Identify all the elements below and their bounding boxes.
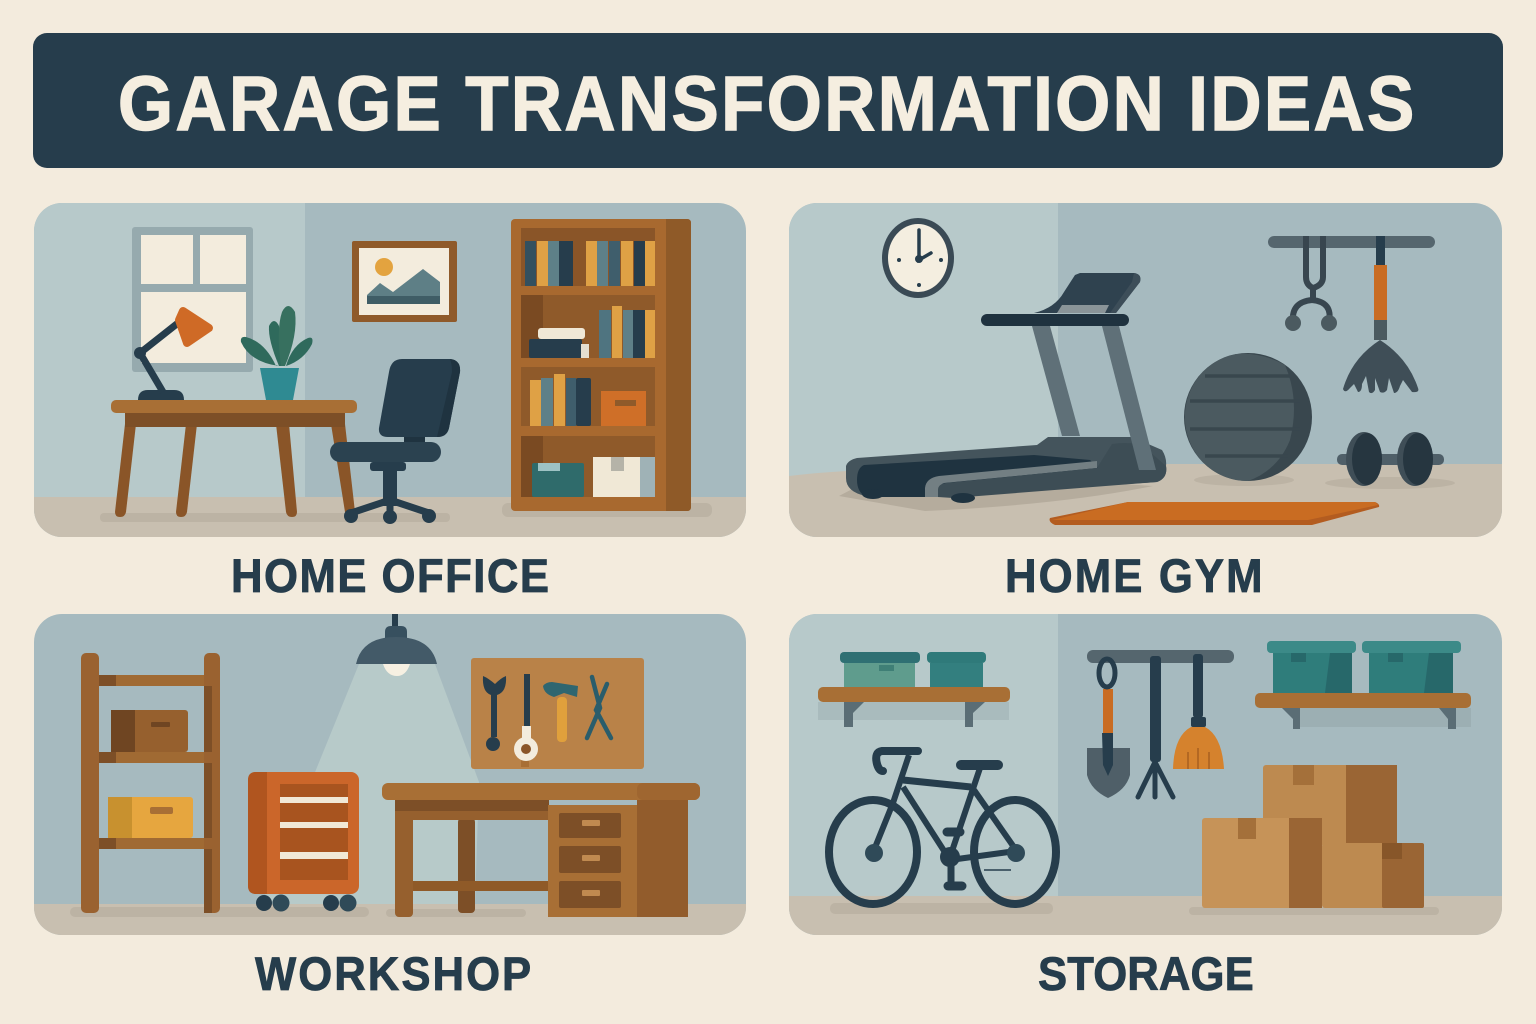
icon: exercise ball xyxy=(1184,353,1312,481)
panel: workshop xyxy=(34,614,746,935)
icon: dumbbell xyxy=(1337,432,1444,486)
panel: storage xyxy=(789,614,1502,935)
panel: home office xyxy=(34,203,746,537)
icon: treadmill xyxy=(846,273,1166,503)
title banner xyxy=(33,33,1503,168)
icon: shelving ladder xyxy=(81,653,220,913)
icon: bookshelf xyxy=(511,219,691,511)
icon: office chair xyxy=(330,359,460,524)
icon: ceiling lamp xyxy=(356,614,437,676)
icon: tool chest xyxy=(248,772,359,912)
boxes on shelf xyxy=(108,710,193,838)
panel: home gym xyxy=(789,203,1502,537)
icon: potted plant xyxy=(241,306,312,400)
label: storage: STORAGE xyxy=(1038,948,1254,1000)
icon: workbench xyxy=(382,783,700,917)
books xyxy=(525,241,655,426)
storage boxes on shelf xyxy=(532,391,655,497)
label: home gym: HOME GYM xyxy=(1005,550,1263,602)
icon: desk xyxy=(111,400,357,517)
icon: window xyxy=(132,227,253,372)
icon: stacked cardboard boxes xyxy=(1202,765,1424,908)
title banner: GARAGE TRANSFORMATION IDEAS xyxy=(118,60,1414,147)
icon: framed picture xyxy=(352,241,457,322)
icon: wall clock xyxy=(882,218,954,298)
label: home office: HOME OFFICE xyxy=(231,550,549,602)
shovel xyxy=(1087,659,1130,798)
icon: desk lamp xyxy=(134,311,209,400)
icon: wall rack with hanging gear xyxy=(1268,236,1435,393)
icon: rack with hanging tools xyxy=(1087,650,1234,798)
icon: right shelf with bins xyxy=(1255,641,1471,729)
icon: pegboard with tools xyxy=(471,658,644,769)
icon: left shelf with bins xyxy=(818,652,1010,727)
icon: yoga mat xyxy=(1050,502,1379,525)
broom xyxy=(1173,654,1224,769)
label: workshop: WORKSHOP xyxy=(255,948,531,1000)
rake xyxy=(1138,656,1173,797)
light beam xyxy=(261,664,479,905)
icon: bicycle xyxy=(829,751,1056,904)
